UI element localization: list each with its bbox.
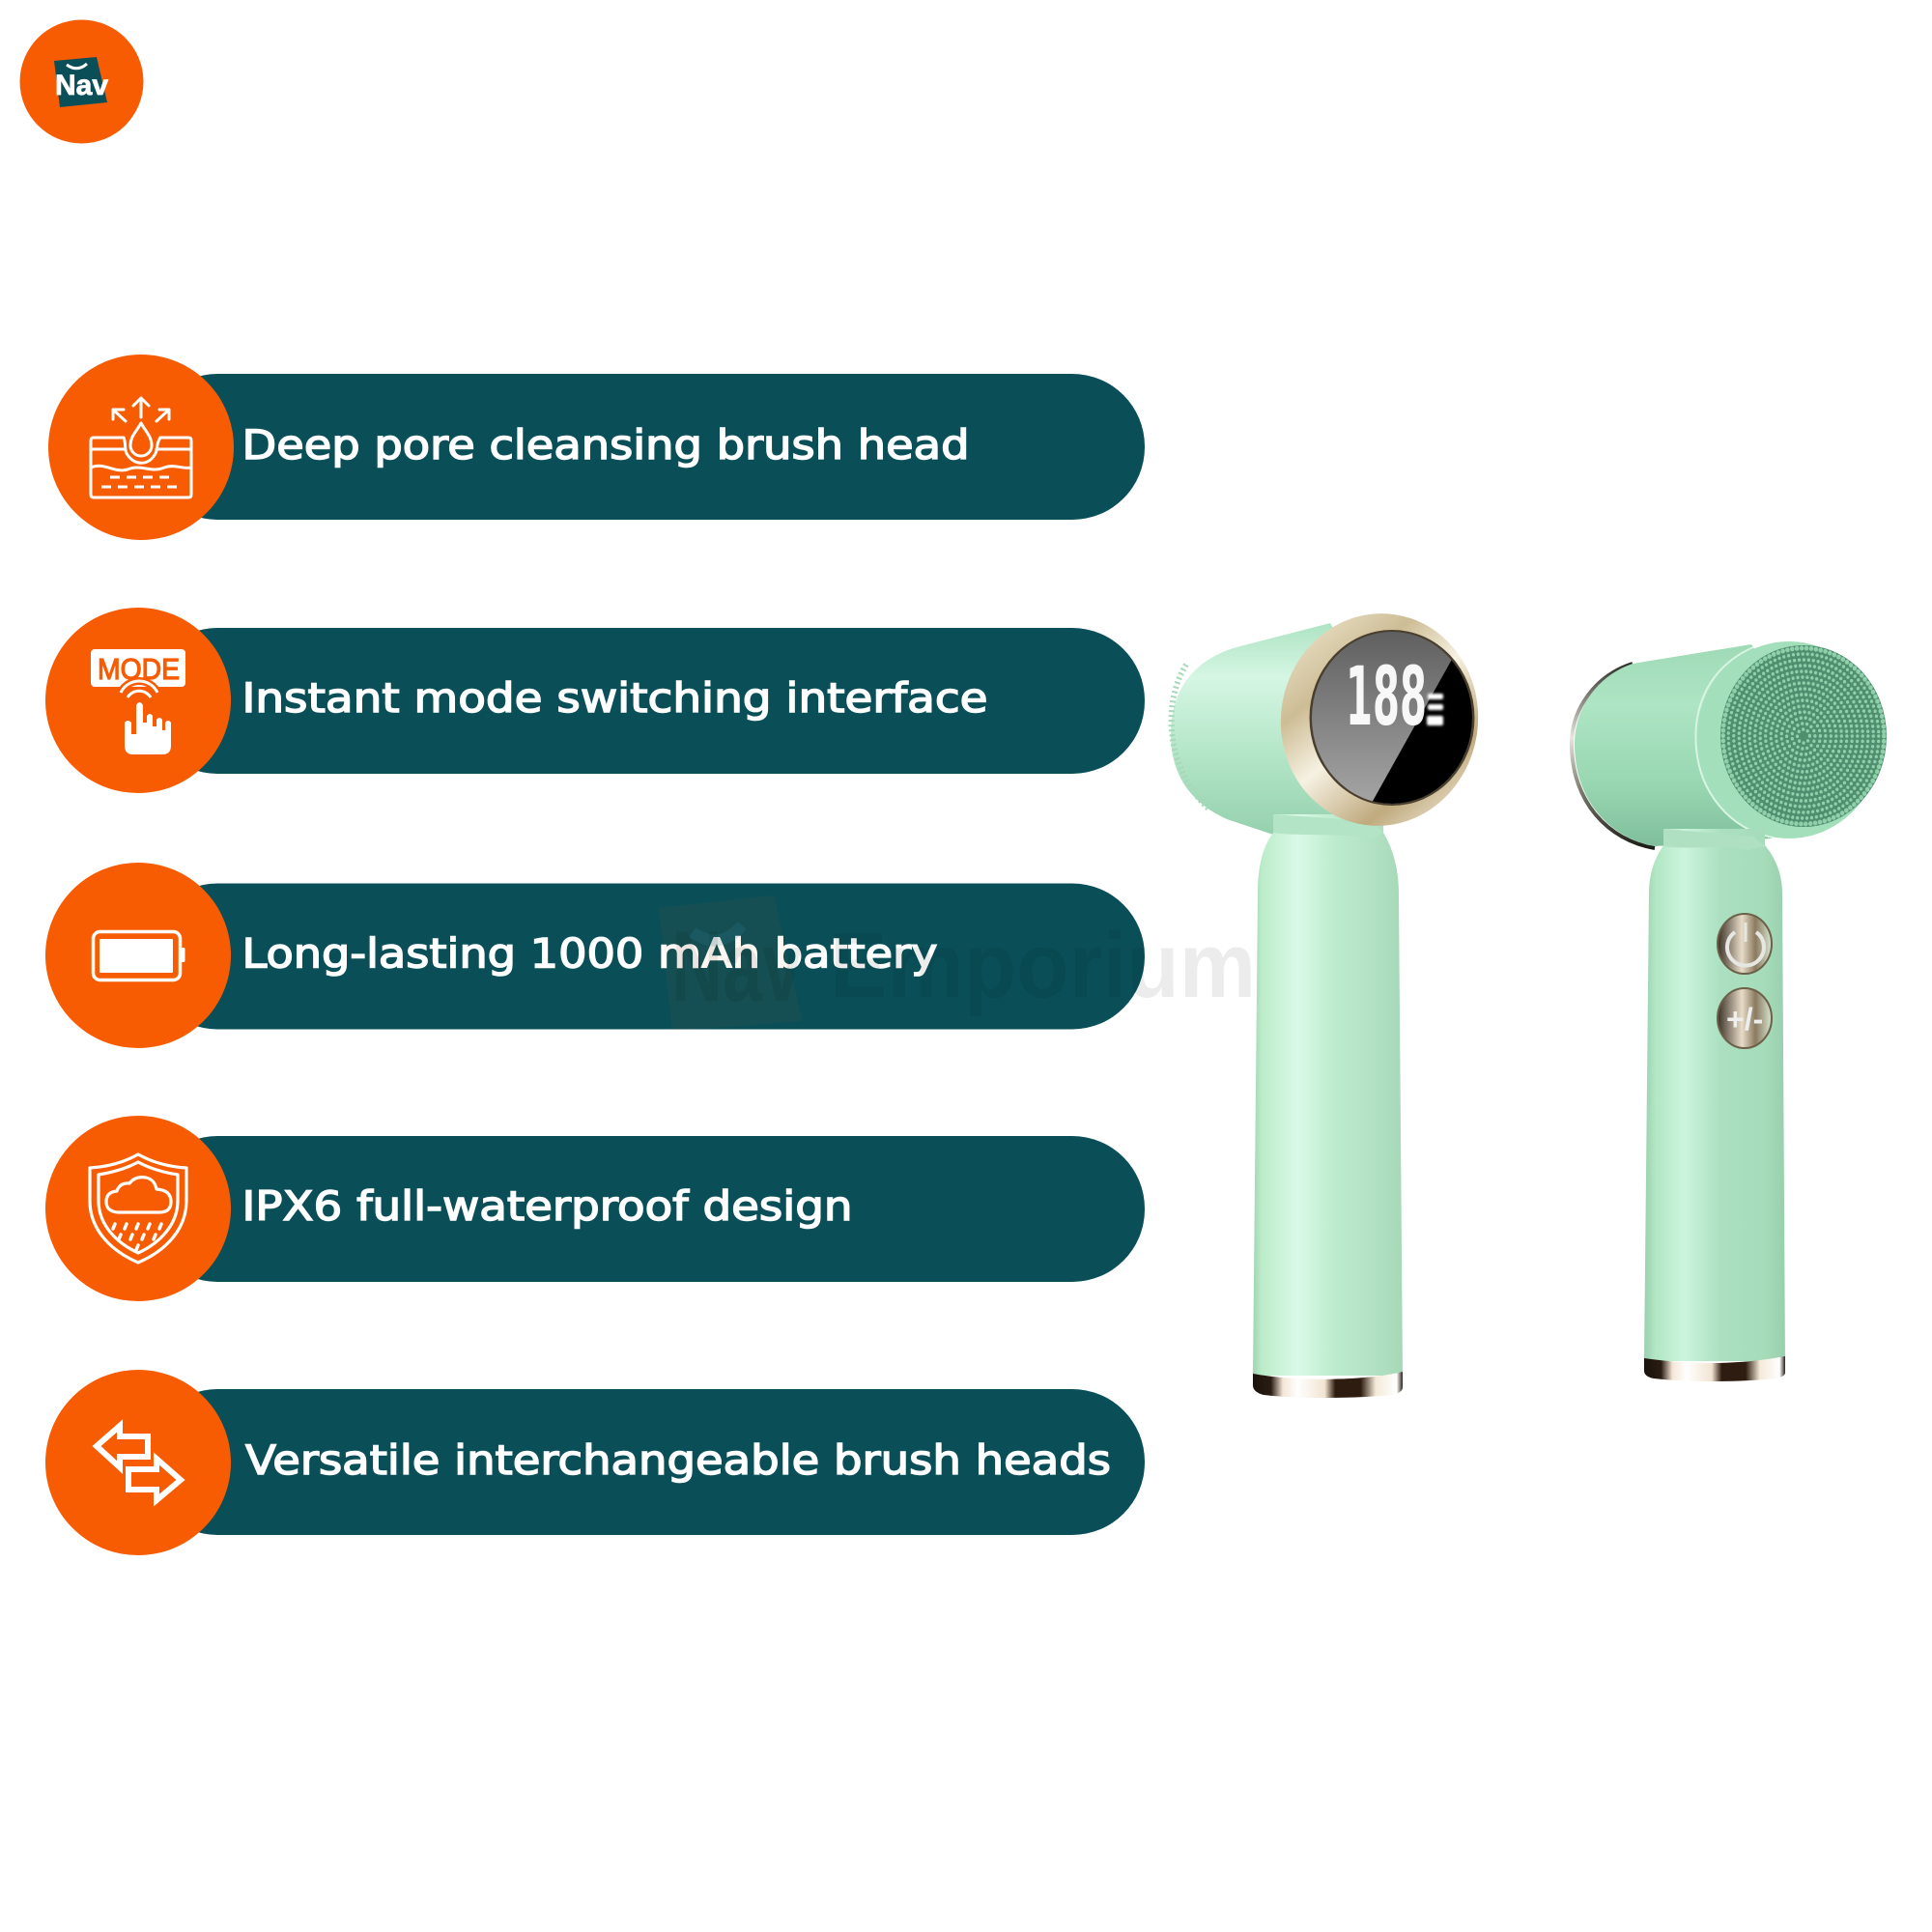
label: Versatile interchangeable brush heads (245, 1436, 1111, 1484)
logo badge (19, 19, 143, 143)
feature row 4: waterproof (45, 1116, 1145, 1301)
head cylinder (1575, 644, 1816, 846)
handle (1644, 829, 1785, 1361)
label: Deep pore cleansing brush head (242, 421, 970, 469)
plus minus button: +/- (1726, 1002, 1763, 1037)
feature row 1: deep pore cleansing (48, 355, 1145, 540)
label: IPX6 full-waterproof design (242, 1182, 852, 1230)
icon: battery (93, 931, 185, 980)
neck (1663, 829, 1765, 850)
base ring (1644, 1356, 1785, 1381)
collar (1696, 641, 1882, 838)
watermark: Nav Emporium: Nav (671, 911, 802, 1023)
product: brush device, display side (1171, 601, 1492, 1398)
digital readout: 188 (1346, 649, 1427, 744)
icon: mode button with hand: MODE (98, 652, 180, 686)
rear metal rim (1572, 664, 1655, 848)
label: Instant mode switching interface (242, 674, 987, 722)
icon: skin pore with droplet (91, 398, 191, 497)
icon: shield with rain cloud (90, 1154, 186, 1263)
plus minus button (1718, 988, 1772, 1048)
head cylinder (1171, 623, 1401, 838)
product: brush device, bristle side (1572, 641, 1887, 1381)
feature row 2: instant mode switching (45, 608, 1145, 793)
watermark: Nav Emporium (659, 895, 1256, 1031)
power button (1718, 914, 1772, 974)
rear bristles (1172, 665, 1209, 810)
silicone brush face (1720, 645, 1887, 827)
infographic canvas (19, 19, 1887, 1555)
feature row 3: battery (45, 863, 1145, 1048)
label: Long-lasting 1000 mAh battery (242, 929, 937, 978)
handle (1253, 814, 1403, 1376)
watermark: Nav Emporium: Emporium (830, 914, 1256, 1017)
digital readout (1346, 649, 1443, 744)
logo badge: Nav (55, 70, 108, 101)
base ring (1253, 1372, 1403, 1398)
screen (1312, 632, 1472, 804)
feature row 5: interchangeable heads (45, 1370, 1145, 1555)
icon: mode button with hand (91, 649, 185, 754)
neck (1273, 814, 1383, 838)
icon: swap arrows (97, 1426, 181, 1500)
metal ring (1267, 601, 1492, 838)
